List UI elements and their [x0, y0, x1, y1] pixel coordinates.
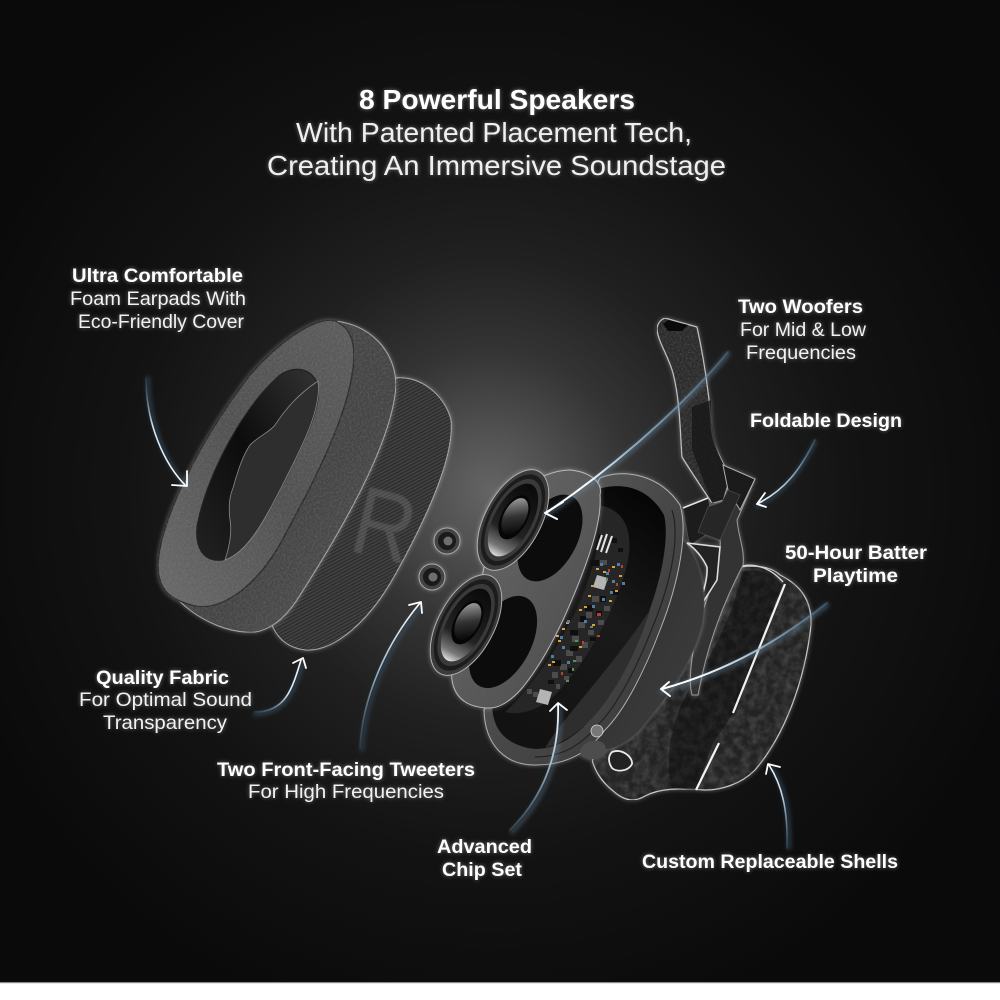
inner cup: [545, 610, 650, 748]
title: 8 Powerful Speakers: [359, 84, 635, 115]
fabric letter R: R: [342, 466, 427, 585]
label: quality fabric: Quality Fabric: [96, 667, 229, 689]
label: two woofers: For Mid & Low: [740, 319, 867, 341]
title: [267, 84, 726, 181]
headband and hinge: [657, 318, 755, 695]
housing ring: [484, 474, 683, 765]
shell white accent long: [733, 584, 785, 713]
label: battery: Playtime: [813, 565, 898, 587]
board components blue: [551, 563, 625, 664]
board base: [505, 505, 629, 713]
label: quality fabric: For Optimal Sound: [79, 689, 252, 711]
cushion front face: [158, 320, 354, 607]
label: foldable design: Foldable Design: [750, 410, 902, 432]
cushion inner hole: [197, 369, 318, 560]
cushion side: [158, 321, 396, 632]
tweeters: [419, 528, 460, 590]
label: two woofers: Two Woofers: [738, 296, 863, 318]
headband strip: [657, 318, 730, 503]
hinge top cap: [723, 465, 755, 510]
board components red: [561, 565, 623, 675]
label: quality fabric: Transparency: [103, 712, 227, 734]
plate hole top: [504, 484, 596, 592]
label: tweeters: Two Front-Facing Tweeters: [217, 759, 475, 781]
headband slot: [663, 320, 688, 331]
label: two woofers: [738, 296, 867, 364]
earpad fabric disc: [272, 378, 451, 650]
board components dark: [548, 534, 623, 684]
woofer top: [462, 458, 564, 582]
tweeter top: [434, 528, 460, 554]
label: battery: [785, 542, 927, 587]
label: ultra comfortable: [70, 265, 246, 333]
shell inner dark panel: [669, 571, 782, 790]
battery body: [592, 540, 704, 750]
see-through window: [225, 381, 318, 560]
plate hole bottom: [455, 585, 551, 699]
housing inner cavity: [492, 486, 666, 749]
woofer bottom: [415, 563, 517, 687]
arrows: [146, 352, 827, 848]
board main chips: [536, 575, 608, 705]
speaker plate: [415, 458, 600, 708]
labels: [70, 84, 927, 881]
board capacitors white: [597, 534, 612, 553]
replaceable shell: [592, 565, 811, 800]
circuit board: [505, 505, 629, 713]
title: Creating An Immersive Soundstage: [267, 150, 726, 181]
arrow: foldable: [757, 440, 815, 507]
housing ring groove: [535, 510, 675, 757]
label: tweeters: [217, 759, 475, 803]
shell clip: [609, 751, 632, 771]
label: chip set: [437, 836, 532, 881]
label: quality fabric: [79, 667, 252, 734]
board components yellow: [548, 566, 622, 666]
arrow: quality fabric: [255, 658, 306, 714]
label: battery: 50-Hour Batter: [785, 542, 927, 564]
rotary knob: [578, 725, 608, 762]
label: ultra comfortable: Ultra Comfortable: [72, 265, 243, 287]
arrow: shells: [766, 764, 789, 848]
title: With Patented Placement Tech,: [296, 117, 692, 148]
earpad foam cushion: [158, 320, 427, 632]
arrow: tweeters: [360, 602, 422, 750]
label: tweeters: For High Frequencies: [248, 781, 444, 803]
label: ultra comfortable: Eco-Friendly Cover: [78, 311, 244, 333]
arrow: earpad cover: [146, 378, 188, 488]
label: shells: Custom Replaceable Shells: [642, 851, 898, 873]
tweeter bottom: [419, 564, 445, 590]
label: two woofers: Frequencies: [746, 342, 856, 364]
shell top edge: [740, 565, 783, 582]
white bracket: [683, 498, 712, 545]
label: ultra comfortable: Foam Earpads With: [70, 288, 246, 310]
label: chip set: Advanced: [437, 836, 532, 858]
board components green: [566, 578, 608, 682]
folding arm: [691, 479, 755, 695]
arrow: chip set: [510, 703, 567, 832]
shell white accent short: [696, 743, 719, 790]
white triangle brace: [687, 543, 720, 610]
label: chip set: Chip Set: [442, 859, 523, 881]
foam block: [698, 490, 740, 540]
headband dark inner band: [692, 400, 730, 503]
arrow: woofers: [545, 352, 728, 519]
arrow: battery: [661, 603, 827, 696]
board components gray: [527, 560, 610, 697]
driver housing: [484, 474, 704, 765]
